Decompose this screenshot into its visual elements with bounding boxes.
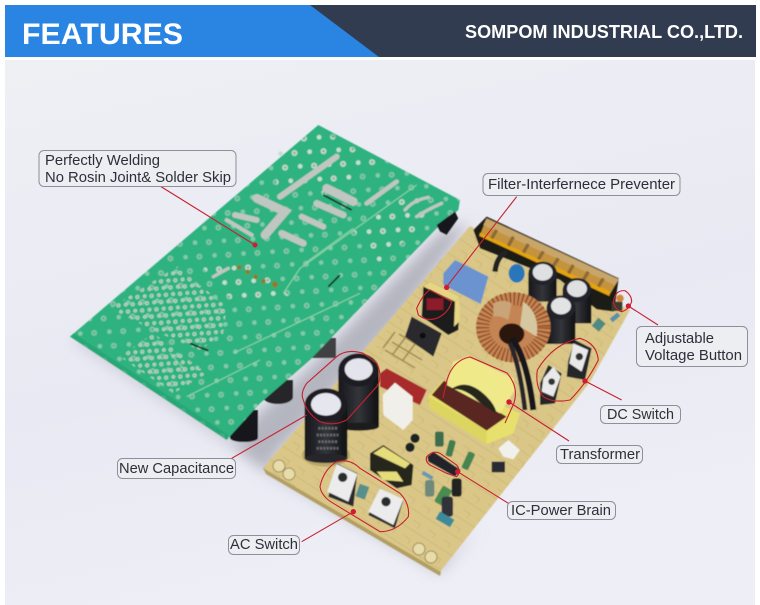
toroid inductor	[476, 292, 551, 410]
black bracket	[437, 212, 458, 235]
red pointer: ac switch	[302, 461, 409, 542]
label: perfectly welding	[39, 150, 236, 186]
label: ic-power brain: IC-Power Brain	[511, 502, 611, 519]
light green trace lines	[170, 185, 417, 397]
red pointer: capacitance	[230, 351, 380, 459]
label: filter-interfernece preventer: Filter-Interfernece Preventer	[488, 176, 675, 193]
label: ac switch: AC Switch	[230, 536, 298, 553]
label: adjustable voltage button	[636, 326, 748, 366]
bridge rectifier	[405, 317, 442, 357]
terminal block	[473, 217, 619, 312]
soft shadows under boards	[70, 222, 478, 574]
header banner	[5, 5, 756, 57]
AC MOSFET 1	[327, 463, 357, 507]
red pointer: filter	[417, 197, 517, 319]
product photo: two circuit boards	[70, 125, 630, 576]
yellow circuit board	[263, 226, 630, 576]
green circuit board	[70, 125, 460, 440]
adjustable potentiometer	[592, 295, 624, 332]
MOSFET dc 1	[567, 340, 592, 380]
components: upper right	[405, 217, 624, 410]
label: new capacitance: New Capacitance	[119, 460, 234, 477]
main transformer	[428, 357, 520, 444]
red pointer: transformer	[443, 357, 569, 441]
black marks	[190, 195, 352, 351]
electrolytic capacitor 2	[563, 278, 591, 323]
electrolytic capacitor 3	[547, 295, 575, 344]
electrolytic capacitor 1	[528, 262, 557, 302]
label: dc switch: DC Switch	[607, 406, 674, 423]
row of gold pads	[237, 265, 278, 287]
red pointer: adjustable	[613, 291, 658, 325]
red pointer: welding	[160, 186, 258, 248]
small dark components	[495, 252, 507, 272]
blue film capacitor	[443, 260, 488, 304]
AC MOSFET 2	[368, 488, 403, 528]
heading: features: FEATURES	[22, 18, 183, 51]
rear large capacitor	[338, 353, 379, 431]
small transformer	[422, 282, 460, 335]
red pointer: ic	[426, 452, 508, 503]
label: adjustable voltage button: Voltage Button	[645, 347, 742, 364]
MOSFET dc 2	[540, 365, 562, 405]
red pointer: dc switch	[537, 338, 622, 401]
front large capacitor	[302, 388, 350, 467]
green caps and resistors	[355, 432, 505, 527]
capacitors under green board	[230, 338, 336, 442]
red film capacitor	[380, 368, 427, 405]
silver traces	[213, 157, 442, 277]
solder dot clusters	[110, 130, 437, 393]
label: perfectly welding: Perfectly Welding	[45, 152, 160, 169]
small board transformer	[370, 445, 413, 488]
IC chip	[427, 452, 461, 477]
blue disc capacitor	[509, 264, 525, 283]
company name: SOMPOM INDUSTRIAL CO.,LTD.	[465, 22, 743, 42]
label: perfectly welding: No Rosin Joint& Solder Skip	[45, 169, 231, 186]
label: adjustable voltage button: Adjustable	[645, 330, 714, 347]
white connector block	[383, 383, 413, 430]
white connector small	[498, 440, 520, 459]
components: lower left	[302, 353, 520, 528]
label: transformer: Transformer	[560, 446, 640, 463]
small transistors	[405, 434, 420, 452]
